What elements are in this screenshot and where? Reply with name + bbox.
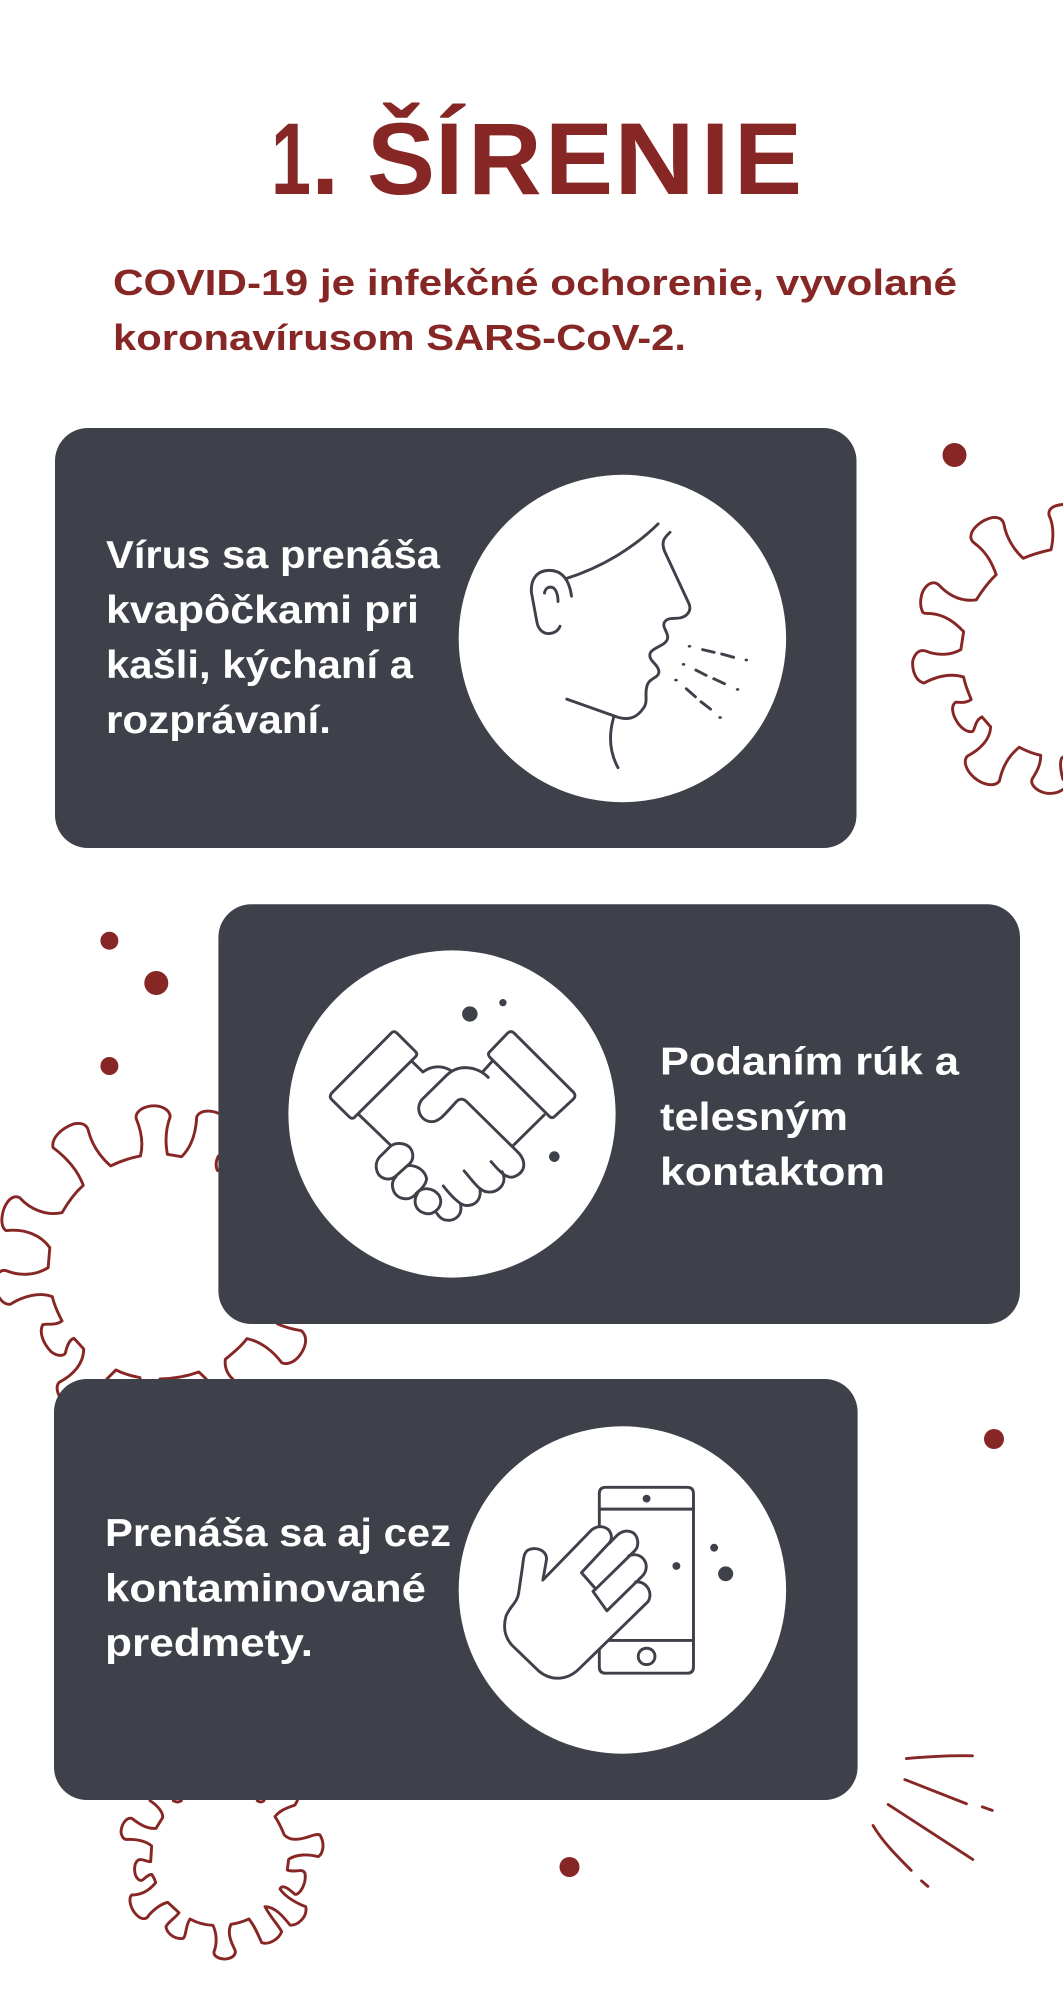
icon: handshake	[330, 999, 575, 1220]
text: handshake: kontaktom	[660, 1151, 885, 1194]
icon circle: coughing	[459, 475, 786, 802]
title: .	[311, 102, 339, 216]
icon circle: phone	[459, 1426, 786, 1754]
virus: left middle	[0, 1106, 306, 1403]
text: contaminated objects: predmety.	[105, 1622, 313, 1665]
intro text	[113, 262, 957, 358]
text: droplets: kvapôčkami pri	[106, 589, 419, 632]
text: contaminated objects: kontaminované	[105, 1568, 426, 1610]
dot: left lower	[100, 1057, 118, 1075]
virus: top right	[913, 505, 1063, 793]
panel: droplets	[55, 428, 856, 848]
title	[271, 102, 802, 216]
virus: bottom left	[121, 1801, 323, 1959]
text: droplets: rozprávaní.	[106, 699, 331, 742]
title: IE	[701, 102, 802, 216]
dot: left large	[144, 971, 168, 995]
title: ŠÍRE	[367, 102, 613, 216]
intro text: COVID-19 je infekčné ochorenie, vyvolané	[113, 262, 957, 303]
text: contaminated objects: Prenáša sa aj cez	[105, 1512, 451, 1555]
text: droplets	[106, 534, 441, 742]
text: handshake: Podaním rúk a	[660, 1040, 960, 1084]
icon circle: handshake	[288, 950, 616, 1278]
icon: coughing face	[531, 524, 748, 768]
dot: bottom	[560, 1857, 580, 1877]
text: handshake	[660, 1040, 960, 1194]
burst lines	[873, 1756, 992, 1886]
text: droplets: Vírus sa prenáša	[106, 534, 441, 577]
dot: top right	[942, 443, 966, 467]
dot: right lower	[984, 1429, 1004, 1449]
panel: contaminated objects	[54, 1379, 858, 1800]
panel: handshake	[218, 904, 1020, 1324]
icon: hand touching phone	[505, 1487, 733, 1678]
text: droplets: kašli, kýchaní a	[106, 644, 414, 687]
dot: left upper	[100, 932, 118, 950]
title: 1	[271, 102, 311, 216]
title: N	[614, 102, 695, 216]
text: handshake: telesným	[660, 1096, 848, 1139]
text: contaminated objects	[105, 1512, 451, 1665]
intro text: koronavírusom SARS-CoV-2.	[113, 317, 686, 358]
